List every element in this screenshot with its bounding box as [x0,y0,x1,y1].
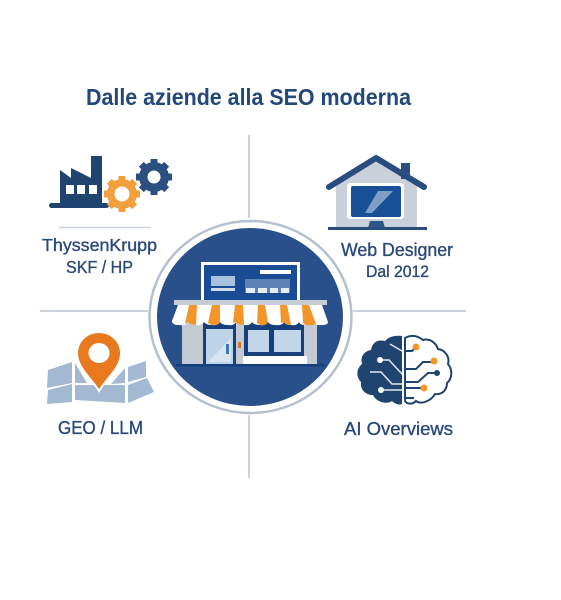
label: Web Designer Dal 2012: Dal 2012 [366,263,429,281]
icon: house with monitor [328,158,427,230]
label: Web Designer Dal 2012 [341,240,453,281]
label: ThyssenKrupp SKF / HP: ThyssenKrupp [42,235,157,255]
label: AI Overviews: AI Overviews [344,419,453,439]
icon: brain half circuit [357,336,451,405]
label: Web Designer Dal 2012: Web Designer [341,240,453,260]
icon: map with location pin [47,332,154,404]
central store badge [150,221,352,413]
label: GEO / LLM: GEO / LLM [58,418,143,438]
store front [176,322,325,366]
label: ThyssenKrupp SKF / HP: SKF / HP [66,257,133,277]
title: Dalle aziende alla SEO moderna [86,84,411,110]
icon: factory and gears [49,156,172,212]
store sign board [201,262,300,303]
label: ThyssenKrupp SKF / HP [42,235,157,277]
awning [172,300,328,325]
